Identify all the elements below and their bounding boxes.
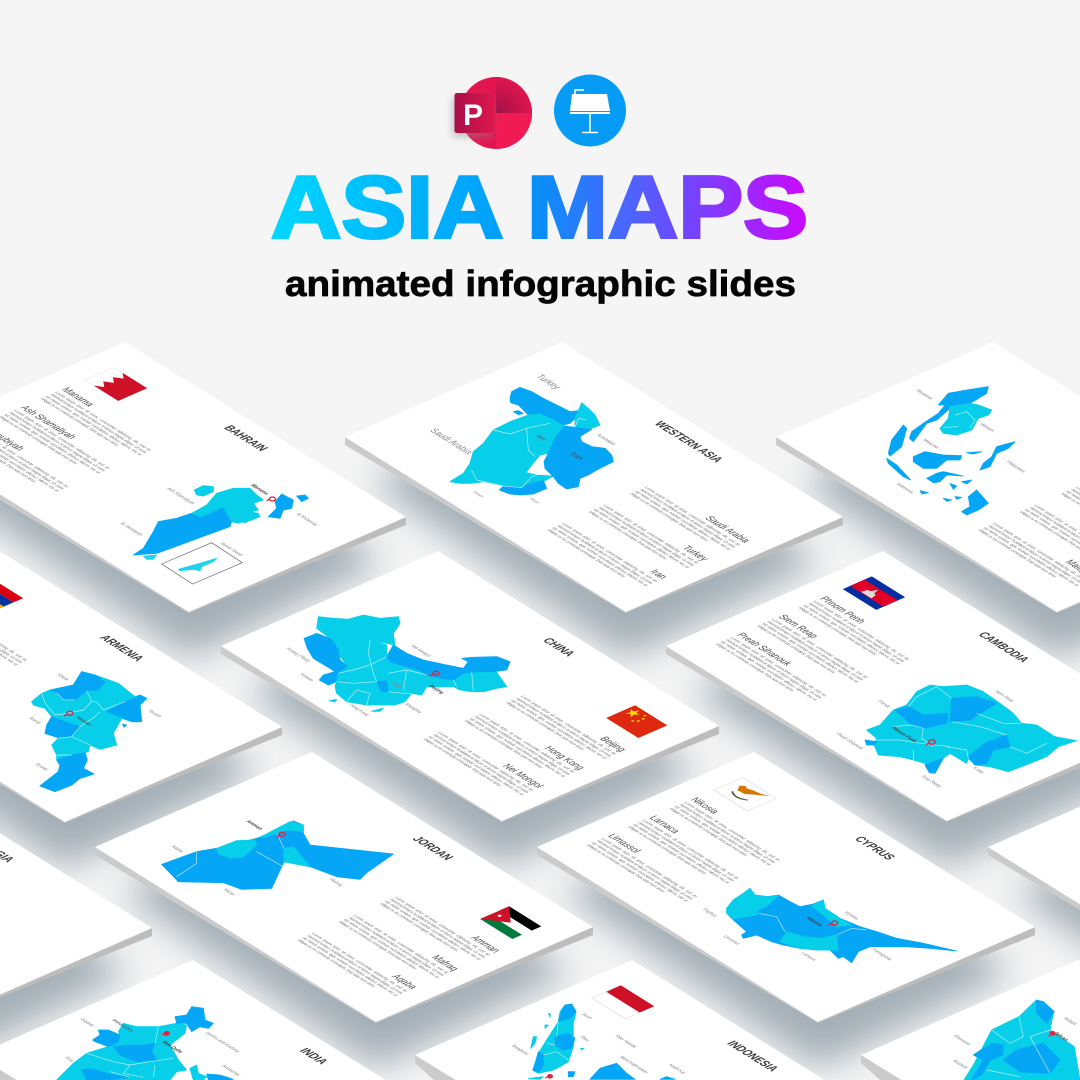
map: Indonesia: Bengkulu (510, 1044, 531, 1056)
map: Cambodia (834, 685, 1077, 789)
Bahrain slide content: Lorem ipsum dolor sit amet, consectetur adipiscing elit, sed do eiusmod tempor incididunt ut labore et dolore magna aliqua. Ut enim ad minim veniam, quis nostrud exercitation ullamco laboris nisi ut aliquip ex ea commodo consequat. Duis aute irure dolor. (39, 391, 153, 456)
Indonesia slide title and flag (592, 978, 781, 1080)
panel: Indonesia slide (415, 960, 825, 1080)
Indonesia slide title and flag: INDONESIA (723, 1040, 781, 1073)
Bahrain slide content: BAHRAIN (220, 424, 270, 453)
map: South-East Asia: Malaysia (921, 438, 941, 450)
map: Cambodia: Kratie (971, 766, 986, 775)
Jordan slide content: Lorem ipsum dolor sit amet, consectetur adipiscing elit, sed do eiusmod tempor incididunt ut labore et dolore magna aliqua. Ut enim ad minim veniam, quis nostrud exercitation ullamco laboris nisi ut aliquip ex ea commodo consequat. Duis aute irure dolor. (296, 932, 409, 997)
map: bottom-right country: Bushehr (951, 1059, 970, 1070)
map: India: New Delhi (160, 1040, 184, 1054)
Georgia slide content (0, 753, 152, 1023)
Cyprus slide content: Lorem ipsum dolor sit amet, consectetur adipiscing elit, sed do eiusmod tempor incididunt ut labore et dolore magna aliqua. Ut enim ad minim veniam, quis nostrud exercitation ullamco laboris nisi ut aliquip ex ea commodo consequat. Duis aute irure dolor. (668, 801, 782, 866)
map: Western Asia: Azerbaijan (595, 433, 618, 446)
map: Cyprus: Nikosia (804, 916, 824, 927)
map: bottom-right country (951, 1000, 1080, 1080)
map: Jordan: Amman (244, 820, 264, 831)
map: Indonesia: Aceh (580, 1013, 594, 1020)
Cambodia slide content (666, 551, 1080, 821)
map: South-East Asia: Indonesia (894, 482, 916, 495)
map: India: Jammu and Kashmir (203, 1031, 241, 1054)
Cambodia slide content: CAMBODIA (975, 631, 1032, 664)
Cambodia slide content: Lorem ipsum dolor sit amet, consectetur adipiscing elit, sed do eiusmod tempor incididunt ut labore et dolore magna aliqua. Ut enim ad minim veniam, quis nostrud exercitation ullamco laboris nisi ut aliquip ex ea commodo consequat. Duis aute irure dolor. (797, 600, 911, 665)
Western Asia slide content: Lorem ipsum dolor sit amet, consectetur adipiscing elit, sed do eiusmod tempor incididunt ut labore et dolore magna aliqua. Ut enim ad minim veniam, quis nostrud exercitation ullamco laboris nisi ut aliquip ex ea commodo consequat. Duis aute irure dolor. (546, 522, 659, 587)
soft shadows under the slides (0, 387, 1080, 1069)
map: Cambodia: Phnom Penh (889, 726, 918, 743)
map: Indonesia: Riau Islands (613, 1034, 639, 1049)
map: Bahrain: Al Janubiyah (118, 522, 144, 537)
bottom-right slide face (861, 960, 1080, 1080)
map: Armenia: Syunik (33, 762, 50, 772)
Western Asia slide content: Lorem ipsum dolor sit amet, consectetur adipiscing elit, sed do eiusmod tempor incididunt ut labore et dolore magna aliqua. Ut enim ad minim veniam, quis nostrud exercitation ullamco laboris nisi ut aliquip ex ea commodo consequat. Duis aute irure dolor. (629, 486, 742, 551)
map: China: Xizang (Tibet) (284, 647, 312, 663)
South-East Asia slide content (776, 342, 1080, 612)
Western Asia slide content: Saudi Arabia (702, 515, 753, 545)
China slide content (221, 551, 719, 821)
China slide content: Hong Kong (541, 745, 587, 772)
far-right slide face (988, 752, 1080, 1022)
map: Armenia: Yerevan (73, 716, 93, 727)
subtitle: animated infographic slides (285, 263, 796, 304)
map: Western Asia: Turkey (533, 373, 564, 390)
map: Cambodia: Preah Sihanouk (834, 732, 865, 751)
map: South-East Asia: Philippines (1004, 460, 1027, 474)
Armenia slide content (0, 552, 282, 822)
panel: China slide (221, 551, 719, 822)
Jordan slide content: Lorem ipsum dolor sit amet, consectetur adipiscing elit, sed do eiusmod tempor incididunt ut labore et dolore magna aliqua. Ut enim ad minim veniam, quis nostrud exercitation ullamco laboris nisi ut aliquip ex ea commodo consequat. Duis aute irure dolor. (337, 914, 450, 979)
map: China: Yunnan (297, 672, 316, 682)
map: India: Arunachal (220, 1064, 241, 1077)
Jordan slide content (95, 752, 593, 1022)
Cambodia slide content: Siem Reap (775, 613, 821, 640)
map: Armenia: Shirak (55, 673, 71, 682)
map: Jordan: Aqaba (169, 845, 185, 854)
map: India: Gujarat (78, 1018, 96, 1028)
panel: South-East Asia slide (776, 342, 1080, 613)
Cyprus slide content: Larnaca (646, 814, 683, 835)
map: Western Asia: Oman (528, 497, 541, 504)
Cambodia slide content: Lorem ipsum dolor sit amet, consectetur adipiscing elit, sed do eiusmod tempor incididunt ut labore et dolore magna aliqua. Ut enim ad minim veniam, quis nostrud exercitation ullamco laboris nisi ut aliquip ex ea commodo consequat. Duis aute irure dolor. (714, 636, 828, 701)
Cyprus slide content: CYPRUS (851, 835, 897, 862)
Jordan slide content: Lorem ipsum dolor sit amet, consectetur adipiscing elit, sed do eiusmod tempor incididunt ut labore et dolore magna aliqua. Ut enim ad minim veniam, quis nostrud exercitation ullamco laboris nisi ut aliquip ex ea commodo consequat. Duis aute irure dolor. (379, 896, 492, 961)
panel: bottom-right slide (861, 960, 1080, 1080)
map: South-East Asia: Myanmar (914, 389, 935, 401)
panel: Georgia slide (0, 753, 152, 1024)
Western Asia slide content: WESTERN ASIA (651, 420, 725, 464)
Indonesia slide face (415, 960, 825, 1080)
map: Western Asia: Saudi Arabia (427, 427, 476, 456)
map: China: Beijing (427, 684, 445, 695)
map: Cyprus: Kyrenia (842, 911, 861, 921)
map: South-East Asia (887, 387, 1027, 515)
panel: far-right slide (988, 752, 1080, 1023)
panel: Cyprus slide (537, 752, 1035, 1023)
map: bottom-right country: Tehran (1051, 1032, 1070, 1042)
map: China (284, 615, 510, 717)
map: Bahrain: Hawar Island (218, 542, 245, 557)
map: Cambodia: Pursat (876, 700, 892, 709)
map: Cyprus (701, 888, 957, 963)
map: Western Asia: Iran (567, 451, 587, 461)
Cyprus slide content: Lorem ipsum dolor sit amet, consectetur adipiscing elit, sed do eiusmod tempor incididunt ut labore et dolore magna aliqua. Ut enim ad minim veniam, quis nostrud exercitation ullamco laboris nisi ut aliquip ex ea commodo consequat. Duis aute irure dolor. (585, 837, 699, 902)
Western Asia slide content: Turkey (679, 544, 711, 563)
Bahrain slide content: Manama (58, 386, 97, 408)
map: China: Shanghai (402, 702, 423, 714)
map: Jordan: Ma'an (221, 888, 237, 897)
Western Asia slide content: Iran (647, 568, 670, 581)
title: ASIA MAPS: ASIA MAPS (271, 158, 808, 256)
map: China: Hubei (389, 681, 404, 689)
China slide content: Beijing (596, 735, 629, 753)
map: Bahrain (118, 484, 319, 584)
map: Armenia: Ararat (27, 716, 43, 725)
map: Indonesia: North Kal (666, 1063, 687, 1075)
map: Western Asia (427, 373, 618, 504)
panel: Armenia slide (0, 552, 282, 823)
map: Bahrain: Al Muharraq (294, 512, 319, 527)
map: India: Goa (63, 1056, 76, 1063)
map: Western Asia: Yemen (472, 490, 486, 498)
icon: PowerPoint: P (463, 99, 483, 132)
map: bottom-right country: Khorasan (951, 1034, 973, 1046)
Jordan slide content: JORDAN (409, 835, 456, 862)
Bahrain slide content (0, 342, 406, 612)
China slide content: Nei Mongol (499, 763, 546, 790)
map: India (57, 1007, 241, 1080)
map: Cambodia: Siem Reap (992, 690, 1016, 703)
map: Indonesia: Riau (578, 1035, 592, 1043)
map: Cyprus: Larnaca (799, 951, 818, 962)
Bahrain slide content: Lorem ipsum dolor sit amet, consectetur adipiscing elit, sed do eiusmod tempor incididunt ut labore et dolore magna aliqua. Ut enim ad minim veniam, quis nostrud exercitation ullamco laboris nisi ut aliquip ex ea commodo consequat. Duis aute irure dolor. (0, 409, 111, 474)
map: South-East Asia: Vietnam (977, 422, 996, 433)
map: Indonesia: West Kalimantan (617, 1055, 650, 1075)
China slide content: Lorem ipsum dolor sit amet, consectetur adipiscing elit, sed do eiusmod tempor incididunt ut labore et dolore magna aliqua. Ut enim ad minim veniam, quis nostrud exercitation ullamco laboris nisi ut aliquip ex ea commodo consequat. Duis aute irure dolor. (422, 731, 535, 796)
map: India: Maharashtra (110, 1018, 136, 1033)
Cambodia slide content: Lorem ipsum dolor sit amet, consectetur adipiscing elit, sed do eiusmod tempor incididunt ut labore et dolore magna aliqua. Ut enim ad minim veniam, quis nostrud exercitation ullamco laboris nisi ut aliquip ex ea commodo consequat. Duis aute irure dolor. (756, 618, 869, 683)
Western Asia slide content: Lorem ipsum dolor sit amet, consectetur adipiscing elit, sed do eiusmod tempor incididunt ut labore et dolore magna aliqua. Ut enim ad minim veniam, quis nostrud exercitation ullamco laboris nisi ut aliquip ex ea commodo consequat. Duis aute irure dolor. (587, 504, 700, 569)
China slide content: Lorem ipsum dolor sit amet, consectetur adipiscing elit, sed do eiusmod tempor incididunt ut labore et dolore magna aliqua. Ut enim ad minim veniam, quis nostrud exercitation ullamco laboris nisi ut aliquip ex ea commodo consequat. Duis aute irure dolor. (463, 713, 576, 778)
map: Cyprus: Famagusta (870, 948, 894, 962)
map: Jordan: Mafraq (327, 878, 345, 888)
map: Cambodia: Svay Rieng (919, 775, 943, 789)
Armenia slide content: ARMENIA (96, 634, 146, 663)
China slide content: Lorem ipsum dolor sit amet, consectetur adipiscing elit, sed do eiusmod tempor incididunt ut labore et dolore magna aliqua. Ut enim ad minim veniam, quis nostrud exercitation ullamco laboris nisi ut aliquip ex ea commodo consequat. Duis aute irure dolor. (505, 695, 618, 760)
India slide face (0, 960, 386, 1080)
icon: Keynote (554, 74, 626, 146)
Cambodia slide content: Preah Sihanouk (733, 631, 795, 668)
panel: Cambodia slide (666, 551, 1080, 822)
map: Bahrain: Ash Shamaliyah (165, 487, 196, 505)
Cyprus slide content: Lorem ipsum dolor sit amet, consectetur adipiscing elit, sed do eiusmod tempor incididunt ut labore et dolore magna aliqua. Ut enim ad minim veniam, quis nostrud exercitation ullamco laboris nisi ut aliquip ex ea commodo consequat. Duis aute irure dolor. (627, 819, 740, 884)
panel: India slide (0, 960, 386, 1080)
map: Bahrain: Manama (249, 484, 270, 496)
map: Indonesia (510, 1004, 687, 1079)
panel: Bahrain slide (0, 342, 406, 613)
panel: Jordan slide (95, 752, 593, 1023)
map: Armenia: Tavush (146, 709, 163, 719)
China slide content: CHINA (539, 637, 577, 658)
Jordan slide content: Aqaba (388, 973, 420, 991)
Bahrain slide content: Ash Shamaliyah (17, 404, 79, 441)
India slide title: INDIA (296, 1047, 331, 1066)
map: Western Asia: Iraq (534, 434, 547, 441)
Cyprus slide content: Limassol (604, 832, 643, 855)
Cambodia slide content: Phnom Penh (816, 595, 868, 625)
Jordan slide content: Mafraq (428, 954, 461, 973)
map: China: Hong Kong (347, 704, 371, 717)
map: bottom-right country: Ardabil (1061, 1017, 1078, 1026)
map: Jordan (162, 820, 393, 897)
panel: Western Asia slide (345, 342, 843, 613)
Western Asia slide content (345, 342, 843, 612)
Jordan slide content: Amman (467, 934, 503, 954)
Cyprus slide content (537, 752, 1035, 1022)
map: Armenia (27, 672, 163, 792)
map: Cyprus: Limassol (721, 935, 741, 946)
map: China: Nei Mongol (409, 644, 432, 658)
Cyprus slide content: Nikosia (687, 796, 722, 816)
icon: PowerPoint (452, 77, 532, 149)
map: Cyprus: Paphos (701, 908, 719, 918)
